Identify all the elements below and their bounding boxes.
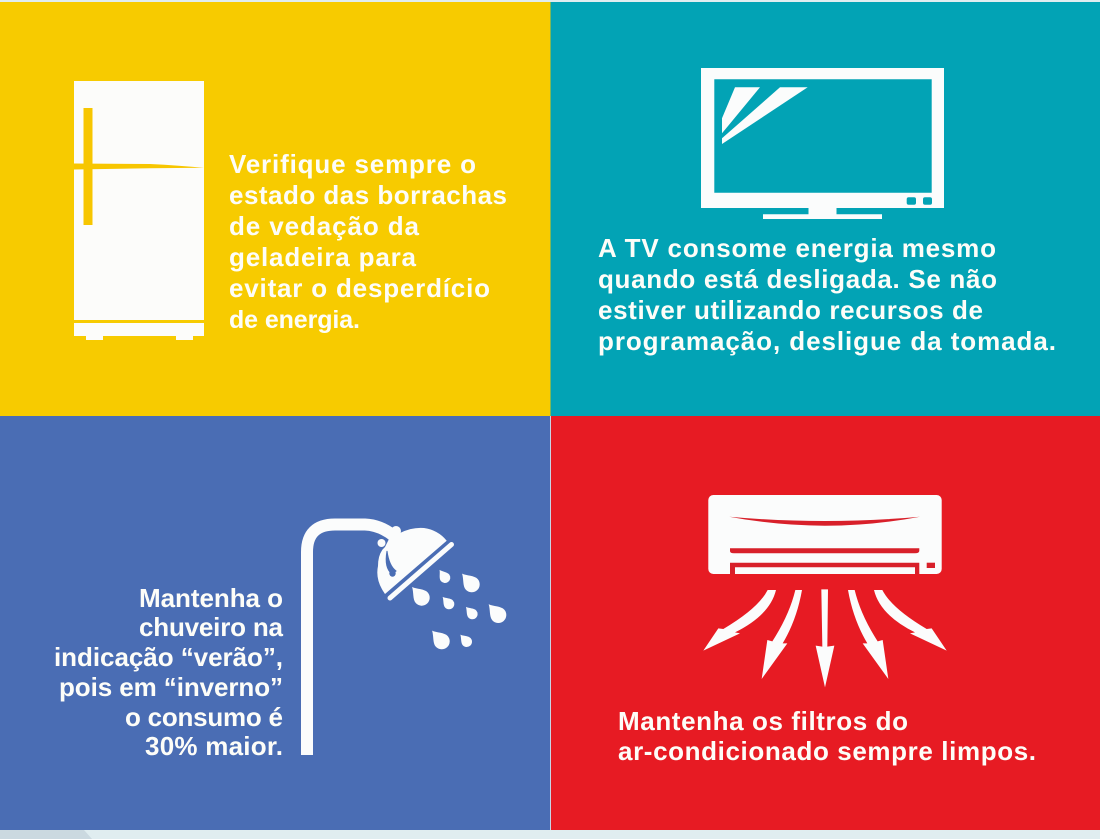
text: shower tip: indicação “verão”,	[54, 642, 283, 672]
text: shower tip	[54, 583, 284, 761]
text: refrigerator tip: evitar o desperdício	[229, 273, 490, 303]
text: shower tip: 30% maior.	[145, 731, 283, 761]
icon: shower	[307, 524, 510, 755]
text: TV tip: quando está desligada. Se não	[598, 264, 997, 294]
panel: air conditioner tip	[550, 416, 1100, 830]
text: refrigerator tip: estado das borrachas	[229, 180, 507, 210]
text: refrigerator tip: de energia.	[229, 306, 360, 334]
text: refrigerator tip: Verifique sempre o	[229, 149, 476, 179]
icon: air conditioner	[703, 495, 947, 687]
text: air conditioner tip	[618, 706, 1036, 766]
text: refrigerator tip: de vedação da	[229, 211, 420, 241]
text: TV tip: estiver utilizando recursos de	[598, 295, 983, 325]
panel: shower tip	[0, 416, 550, 830]
text: shower tip: pois em “inverno”	[59, 672, 283, 702]
text: refrigerator tip	[229, 149, 507, 334]
text: shower tip: Mantenha o	[139, 583, 283, 613]
text: refrigerator tip: geladeira para	[229, 242, 417, 272]
text: TV tip: programação, desligue da tomada.	[598, 326, 1056, 356]
text: shower tip: chuveiro na	[139, 612, 284, 642]
text: air conditioner tip: ar-condicionado sempre limpos.	[618, 736, 1036, 766]
icon: airflow arrows	[703, 589, 947, 687]
icon: refrigerator	[74, 81, 204, 340]
text: air conditioner tip: Mantenha os filtros do	[618, 706, 908, 736]
text: TV tip: A TV consome energia mesmo	[598, 233, 996, 263]
text: shower tip: o consumo é	[125, 702, 283, 732]
icon: television	[701, 68, 944, 219]
icon: water drops	[406, 567, 510, 653]
panel: refrigerator tip	[0, 2, 550, 416]
panel: TV tip	[550, 2, 1100, 416]
text: TV tip	[598, 233, 1056, 356]
